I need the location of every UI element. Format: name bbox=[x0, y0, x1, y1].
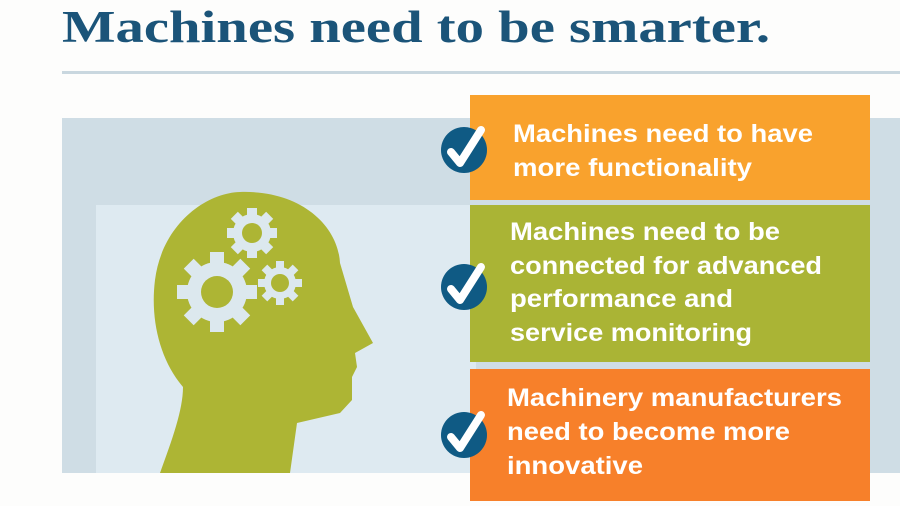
icon: check 1 bbox=[441, 127, 487, 173]
panel: box 1 functionality bbox=[470, 95, 870, 200]
title: Machines need to be smarter. bbox=[62, 2, 770, 52]
panel: box 2 connected: service monitoring bbox=[510, 319, 752, 347]
panel: background bbox=[62, 118, 900, 473]
panel: box 1 functionality: more functionality bbox=[513, 154, 752, 182]
panel: box 3 innovative bbox=[470, 369, 870, 501]
panel: box 1 functionality: Machines need to have bbox=[513, 120, 813, 148]
panel: box 2 connected bbox=[470, 205, 870, 362]
panel: box 3 innovative: innovative bbox=[507, 452, 643, 480]
panel: box 2 connected: performance and bbox=[510, 285, 733, 313]
icon: head with gears bbox=[154, 192, 373, 473]
panel: box 2 connected: Machines need to be bbox=[510, 218, 780, 246]
icon: check 2 bbox=[441, 264, 487, 310]
icon: check 3 bbox=[441, 412, 487, 458]
panel: box 2 connected: connected for advanced bbox=[510, 252, 822, 280]
panel: box 3 innovative: need to become more bbox=[507, 418, 790, 446]
panel: box 3 innovative: Machinery manufacturers bbox=[507, 384, 842, 412]
